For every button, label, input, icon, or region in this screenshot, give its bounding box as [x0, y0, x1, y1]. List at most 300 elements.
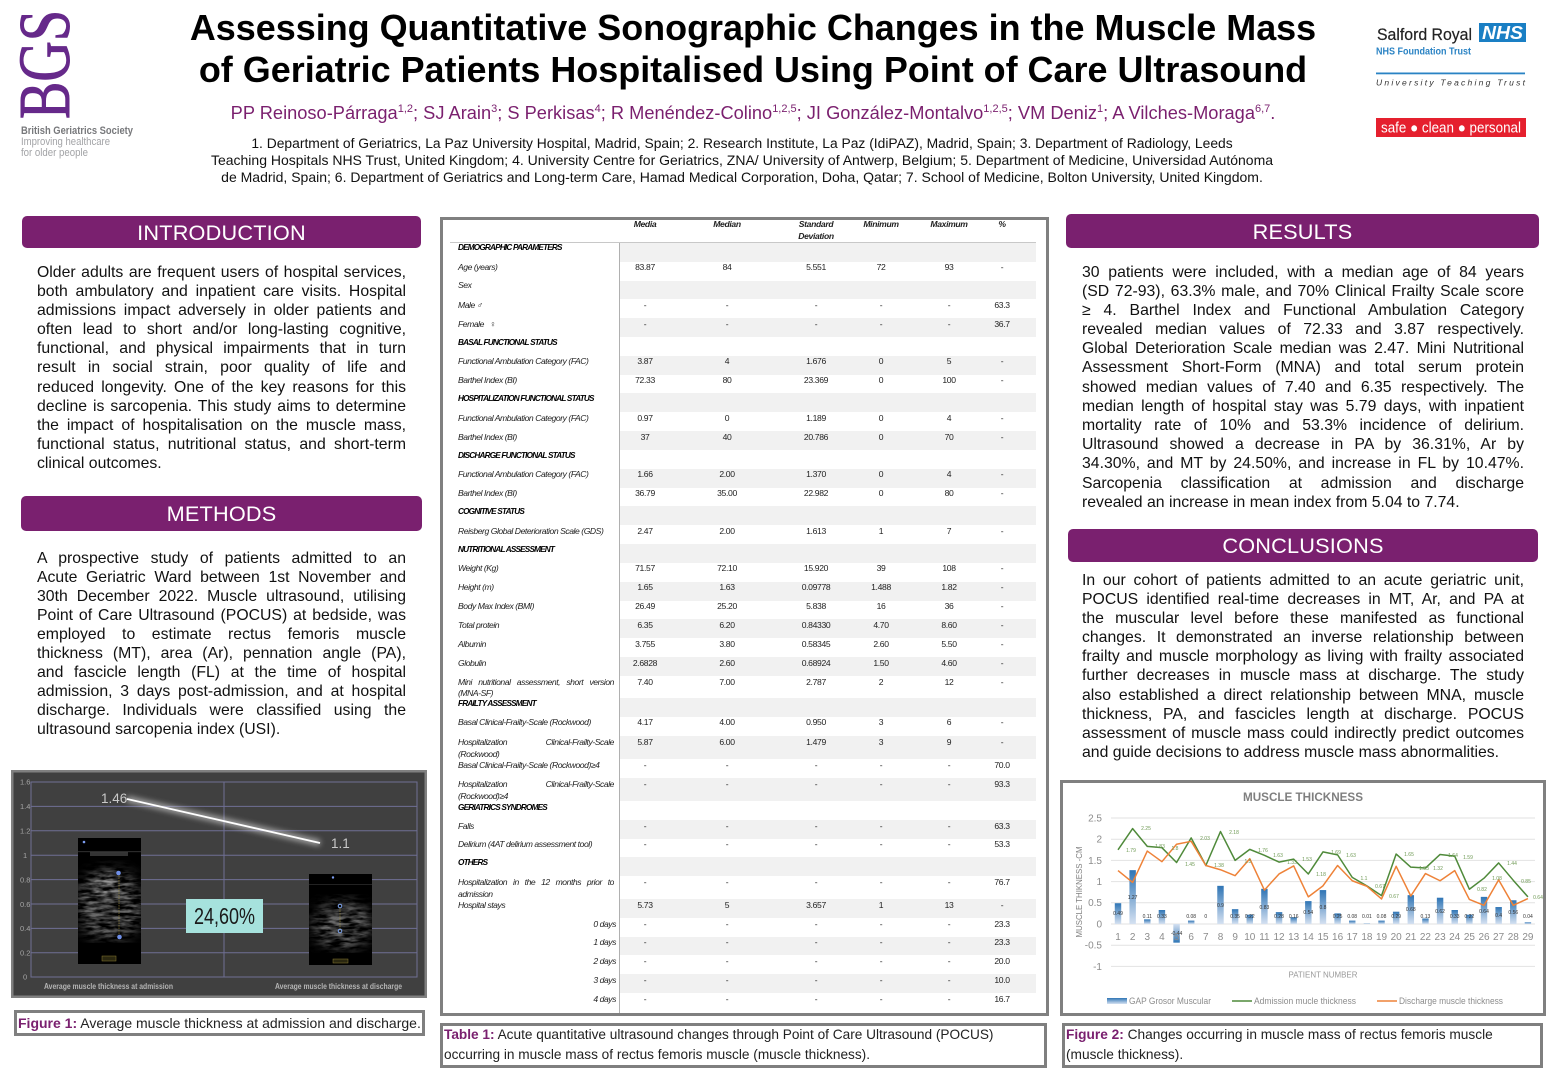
- row: hospitalization CFS: 5.87: [637, 737, 653, 747]
- figure 2: muscle thickness combo chart: 1.79: [1126, 848, 1136, 854]
- row: basal CFS: [458, 717, 1004, 727]
- text: methods: Point of Care Ultrasound (POCUS) at bedside, was: [37, 607, 406, 624]
- figure 2: muscle thickness combo chart: 6: [1188, 932, 1194, 943]
- text: introduction: Older adults are frequent users of hospital services,: [37, 264, 406, 280]
- logo: Salford Royal NHS: NHS Foundation Trust: [1376, 46, 1472, 58]
- row: basal CFS: 4.17: [637, 717, 653, 727]
- figure 2: muscle thickness combo chart: -1: [1093, 962, 1102, 973]
- row: basal BI: 80: [723, 375, 731, 385]
- table header row: Standard: [799, 219, 833, 229]
- row: GDS: 1.613: [806, 526, 826, 536]
- row: 1 days: [443, 937, 1046, 948]
- row: basal BI: 0: [879, 375, 883, 385]
- figure 2: muscle thickness combo chart: 0.08: [1377, 914, 1387, 920]
- figure 2: muscle thickness combo chart: 21: [1405, 932, 1417, 943]
- row: basal FAC: 0: [879, 356, 883, 366]
- row: MNA-SF: Mini nutritional assessment, short version: [458, 677, 614, 687]
- affiliations: Teaching Hospitals NHS Trust, United Kingdom; 4. University Centre for Geriatrics, ZNA/ University of Antwerp, Belgium; 5. Department of Medicine, Universidad Autónoma: [211, 152, 1273, 168]
- text: methods: A prospective study of patients admitted to an: [37, 550, 406, 566]
- row: total protein: -: [1001, 620, 1003, 630]
- row: hospitalization CFS: Hospitalization Clinical-Frailty-Scale: [458, 737, 614, 747]
- text: methods: Acute Geriatric Ward between 1st November and: [37, 569, 406, 586]
- text: results: [1082, 262, 1524, 512]
- text: conclusions: and guide decisions to address muscle mass abnormalities.: [1082, 744, 1499, 761]
- row: female: -: [815, 319, 817, 329]
- row: weight: 72.10: [717, 563, 737, 573]
- figure 2: muscle thickness combo chart: 0.13: [1421, 914, 1430, 920]
- row: weight: 71.57: [635, 563, 655, 573]
- row: hospitalization BI: -: [1001, 432, 1003, 442]
- figure 2: muscle thickness combo chart: 0: [1096, 920, 1102, 930]
- figure 2: muscle thickness combo chart: 2: [1130, 932, 1136, 943]
- row: MNA-SF: 7.40: [637, 677, 653, 687]
- row: prior hospitalization: -: [815, 877, 817, 887]
- row: 2 days: -: [880, 956, 882, 966]
- row: discharge FAC: 2.00: [719, 469, 735, 479]
- row: delirium: [443, 839, 1046, 850]
- row: total protein: Total protein: [458, 620, 499, 630]
- row: basal CFS at least 4: -: [726, 760, 728, 770]
- row: basal CFS at least 4: 70.0: [994, 760, 1010, 770]
- row: basal BI: 72.33: [635, 375, 655, 385]
- row: MNA-SF: 2: [879, 677, 883, 687]
- row: hospital stays: [443, 900, 1046, 911]
- row: 3 days: 10.0: [994, 975, 1010, 985]
- row: prior hospitalization: [443, 877, 1046, 888]
- row: BMI: -: [1001, 601, 1003, 611]
- table header row: Median: [713, 219, 741, 229]
- row: female: -: [726, 319, 728, 329]
- figure 2: muscle thickness combo chart: Discharge muscle thickness: [1399, 996, 1503, 1006]
- figure 1: line chart of average muscle thickness with ultrasound images: 0.4: [20, 924, 30, 933]
- row: 2 days: -: [815, 956, 817, 966]
- row: male: Male ♂: [458, 300, 483, 310]
- row: discharge BI: 0: [879, 488, 883, 498]
- figure 2: muscle thickness combo chart: Admission mucle thickness: [1254, 996, 1356, 1006]
- figure 2: muscle thickness combo chart: 26: [1478, 932, 1490, 943]
- row: 3 days: -: [726, 975, 728, 985]
- figure 2: muscle thickness combo chart: 0.33: [1157, 914, 1167, 920]
- row: geriatrics syndromes: GERIATRICS SYNDROMES: [458, 803, 547, 812]
- figure 2: muscle thickness combo chart: 1: [1096, 877, 1102, 888]
- row: basal CFS at least 4: -: [880, 760, 882, 770]
- figure 2: muscle thickness combo chart: 1.33: [1419, 866, 1429, 872]
- figure 2: muscle thickness combo chart: 17: [1347, 932, 1358, 943]
- figure 2: muscle thickness combo chart: 11: [1259, 932, 1270, 943]
- figure 2: muscle thickness combo chart: 0.67: [1375, 884, 1385, 890]
- text: introduction: [37, 264, 406, 472]
- row: weight: 39: [877, 563, 885, 573]
- caption: figure 2: [1062, 1023, 1543, 1068]
- figure 2: muscle thickness combo chart: 24: [1449, 932, 1461, 943]
- caption: figure 1: Figure 1: Average muscle thickness at admission and discharge.: [18, 1015, 421, 1031]
- row: hospitalization CFS: 3: [879, 737, 883, 747]
- title: [190, 7, 1316, 90]
- row: albumin: -: [1001, 639, 1003, 649]
- figure 1: line chart of average muscle thickness with ultrasound images: 0: [23, 972, 27, 982]
- figure 2: muscle thickness combo chart: 10: [1244, 932, 1256, 943]
- row: albumin: 0.58345: [802, 639, 830, 649]
- row: delirium: -: [815, 839, 817, 849]
- text: methods: 30th December 2022. Muscle ultrasound, utilising: [37, 588, 406, 605]
- text: methods: admission, 3 days post-admission, and at hospital: [37, 683, 406, 700]
- text: conclusions: In our cohort of patients admitted to an acute geriatric unit,: [1082, 572, 1524, 588]
- row: age: [458, 262, 1004, 272]
- row: total protein: 8.60: [941, 620, 957, 630]
- figure 2: muscle thickness combo chart: 0: [1204, 914, 1207, 920]
- figure 2: muscle thickness combo chart: -0.5: [1085, 940, 1102, 952]
- row: discharge FAC: 1.66: [637, 469, 653, 479]
- figure 2: muscle thickness combo chart: 0.62: [1435, 909, 1445, 915]
- row: falls: -: [880, 821, 882, 831]
- row: hospitalization BI: 70: [945, 432, 953, 442]
- row: 0 days: 0 days: [593, 919, 616, 929]
- table header second line: Deviation: [798, 231, 834, 241]
- figure 2: muscle thickness combo chart: [1060, 780, 1546, 1016]
- row: 3 days: 3 days: [593, 975, 616, 985]
- logo: Salford Royal NHS: University Teaching Trust: [1376, 78, 1526, 88]
- row: discharge BI: [458, 488, 1004, 498]
- figure 2: muscle thickness combo chart: 16: [1332, 932, 1344, 943]
- text: conclusions: changes. It demonstrated an inverse relationship between: [1082, 629, 1524, 646]
- figure 2: muscle thickness combo chart: 15: [1317, 932, 1329, 943]
- row: 0 days: [443, 919, 1046, 930]
- row: discharge FAC: -: [1001, 469, 1003, 479]
- figure 2: muscle thickness combo chart: 28: [1508, 932, 1519, 943]
- figure 2: muscle thickness combo chart: 1.32: [1433, 866, 1443, 872]
- figure 1: line chart of average muscle thickness with ultrasound images: 1.1: [331, 836, 350, 851]
- row: 2 days: -: [726, 956, 728, 966]
- row: globulin: 4.60: [941, 658, 957, 668]
- row: discharge BI: 35.00: [717, 488, 737, 498]
- text: results: 30 patients were included, with a median age of 84 years: [1082, 264, 1524, 280]
- row: hospitalization FAC: -: [1001, 413, 1003, 423]
- row: hospitalization FAC: 4: [947, 413, 951, 423]
- row: frailty assessment: FRAILTY ASSESSMENT: [458, 699, 536, 708]
- text: results: 34.30%, and MT by 24.50%, and increase in FL by 10.47%.: [1082, 455, 1524, 472]
- figure 2: muscle thickness combo chart: 1.53: [1302, 857, 1312, 863]
- figure 2: muscle thickness combo chart: 1.5: [1088, 856, 1102, 867]
- table row shading: [450, 242, 1036, 1013]
- row: hospital stays: 1: [879, 900, 883, 910]
- row: delirium: -: [644, 839, 646, 849]
- row: prior hospitalization: 76.7: [994, 877, 1010, 887]
- row: female: Female ♀: [458, 319, 496, 329]
- figure 2: muscle thickness combo chart: 1.18: [1316, 872, 1326, 878]
- figure 2: muscle thickness combo chart: 1.5: [1245, 859, 1252, 865]
- affiliations: 1. Department of Geriatrics, La Paz University Hospital, Madrid, Spain; 2. Research Institute, La Paz (IdiPAZ), Madrid, Spain; 3. Department of Radiology, Leeds: [251, 135, 1233, 151]
- figure 2: muscle thickness combo chart: 0.64: [1533, 895, 1543, 901]
- row: hospital stays: 5.73: [637, 900, 653, 910]
- figure 2: muscle thickness combo chart: 0.33: [1450, 914, 1460, 920]
- row: 2 days: -: [644, 956, 646, 966]
- row: male: -: [726, 300, 728, 310]
- row: falls: 63.3: [994, 821, 1010, 831]
- row: male: 63.3: [994, 300, 1010, 310]
- row: 1 days: 23.3: [994, 937, 1010, 947]
- row: basal CFS: 3: [879, 717, 883, 727]
- text: introduction: decline is sarcopenia. This study aims to determine: [37, 398, 406, 415]
- row: basal functional status: BASAL FUNCTIONAL STATUS: [458, 338, 557, 347]
- row: height: 1.82: [941, 582, 957, 592]
- figure 2: muscle thickness combo chart: 7: [1203, 932, 1209, 943]
- row: 0 days: -: [726, 919, 728, 929]
- text: results: Global Deterioration Scale median was 2.47. Mini Nutritional: [1082, 340, 1524, 357]
- figure 2: muscle thickness combo chart: 0.9: [1217, 903, 1224, 909]
- figure 2: muscle thickness combo chart: 0.11: [1143, 914, 1152, 920]
- row: 3 days: -: [948, 975, 950, 985]
- figure 2: muscle thickness combo chart: 0.01: [1362, 914, 1372, 920]
- text: conclusions: also established a direct relationship between MNA, muscle: [1082, 687, 1524, 704]
- row: basal BI: Barthel Index (BI): [458, 375, 517, 385]
- row: male: -: [644, 300, 646, 310]
- row: total protein: 6.35: [637, 620, 653, 630]
- row: hospitalization BI: 37: [641, 432, 649, 442]
- figure 2: muscle thickness combo chart: 1.69: [1331, 850, 1341, 856]
- figure 2: muscle thickness combo chart: 2: [1096, 834, 1102, 846]
- row: 3 days: -: [880, 975, 882, 985]
- figure 2: muscle thickness combo chart: 8: [1218, 932, 1224, 943]
- row: 4 days: 4 days: [593, 994, 616, 1004]
- row: hospitalization CFS at least 4: -: [880, 779, 882, 789]
- figure 2: muscle thickness combo chart: 0.16: [1289, 914, 1299, 920]
- row: 0 days: -: [815, 919, 817, 929]
- figure 2: muscle thickness combo chart: 0.56: [1508, 910, 1518, 916]
- row: BMI: Body Max Index (BMI): [458, 601, 534, 611]
- row: basal CFS: 0.950: [806, 717, 826, 727]
- row: 3 days: -: [644, 975, 646, 985]
- row: age: 84: [723, 262, 731, 272]
- row: prior hospitalization: -: [644, 877, 646, 887]
- row: female: -: [644, 319, 646, 329]
- figure 2: muscle thickness combo chart: 1: [1115, 932, 1121, 943]
- row: BMI: 26.49: [635, 601, 655, 611]
- heading: methods: METHODS: [167, 501, 276, 526]
- row: basal BI: -: [1001, 375, 1003, 385]
- row: height: 1.65: [637, 582, 653, 592]
- figure 2: muscle thickness combo chart: 0.54: [1303, 910, 1313, 916]
- figure 1: line chart of average muscle thickness with ultrasound images: 1.46: [101, 791, 127, 806]
- row: basal FAC: 5: [947, 356, 951, 366]
- heading: introduction: INTRODUCTION: [137, 220, 306, 245]
- row: hospitalization FAC: Functional Ambulation Category (FAC): [458, 413, 588, 423]
- row: BMI: [458, 601, 1004, 611]
- figure 2: muscle thickness combo chart: PATIENT NUMBER: [1288, 970, 1358, 980]
- row: weight: -: [1001, 563, 1003, 573]
- text: conclusions: frailty and muscle morphology as living with frailty associated: [1082, 648, 1524, 665]
- row: age: 5.551: [806, 262, 826, 272]
- row: basal FAC: 4: [725, 356, 729, 366]
- figure 2: muscle thickness combo chart: 9: [1232, 932, 1238, 943]
- row: falls: Falls: [458, 821, 474, 831]
- logo: Salford Royal NHS: Salford Royal: [1377, 26, 1472, 44]
- figure 2: muscle thickness combo chart: 0.22: [1245, 914, 1255, 920]
- text: results: median length of hospital stay was 5.79 days, with inpatient: [1082, 398, 1524, 415]
- row: basal CFS at least 4: [458, 760, 1010, 770]
- text: introduction: functional status, nutritional status, and short-term: [37, 436, 406, 453]
- row: basal BI: 23.369: [804, 375, 828, 385]
- figure 2: muscle thickness combo chart: 0.49: [1113, 911, 1123, 917]
- figure 2: muscle thickness combo chart: MUSCLE THIKNESS -CM: [1074, 846, 1084, 938]
- row: BMI: 25.20: [717, 601, 737, 611]
- heading: results: [1066, 214, 1539, 248]
- row: hospitalization CFS at least 4: [443, 779, 1046, 790]
- figure 2: muscle thickness combo chart: 23: [1435, 932, 1446, 943]
- row: MNA-SF: -: [1001, 677, 1003, 687]
- row: 1 days: -: [948, 937, 950, 947]
- figure 2: muscle thickness combo chart: 0.04: [1523, 914, 1533, 920]
- row: albumin: [458, 639, 1004, 649]
- figure 1: line chart of average muscle thickness with ultrasound images: 1.4: [20, 802, 30, 811]
- row: albumin: 3.755: [635, 639, 655, 649]
- row: basal FAC: 1.676: [806, 356, 826, 366]
- figure 2: muscle thickness combo chart: 2.18: [1229, 830, 1239, 836]
- text: results: Assessment Short-Form (MNA) and total serum protein: [1082, 359, 1524, 376]
- row: hospitalization BI: 0: [879, 432, 883, 442]
- row: MNA-SF: 7.00: [719, 677, 735, 687]
- figure 2: muscle thickness combo chart: 1.8: [1172, 846, 1179, 852]
- row: prior hospitalization: -: [948, 877, 950, 887]
- row: 4 days: -: [880, 994, 882, 1004]
- figure 2: muscle thickness combo chart: 1.64: [1448, 853, 1458, 859]
- figure 1: line chart of average muscle thickness with ultrasound images: 1.6: [20, 778, 30, 786]
- figure 2: muscle thickness combo chart: 14: [1303, 932, 1314, 943]
- logo: British Geriatrics Society: [18, 10, 133, 159]
- row: 2 days: 20.0: [994, 956, 1010, 966]
- row: hospital stays: 13: [945, 900, 953, 910]
- caption: figure 2: (muscle thickness).: [1066, 1047, 1183, 1062]
- row: MNA-SF: 12: [945, 677, 953, 687]
- text: methods: ultrasound sarcopenia index (USI).: [37, 721, 280, 738]
- row: BMI: 16: [877, 601, 885, 611]
- row: hospitalization CFS at least 4: -: [726, 779, 728, 789]
- text: introduction: reduced longevity. One of the key reasons for this: [37, 379, 406, 396]
- row: falls: -: [815, 821, 817, 831]
- row: globulin: 2.6828: [633, 658, 657, 668]
- row: female: -: [880, 319, 882, 329]
- row: prior hospitalization: Hospitalization in the 12 months prior to: [458, 877, 614, 887]
- row: total protein: [458, 620, 1004, 630]
- row: hospitalization FAC: 1.189: [806, 413, 826, 423]
- row: sex: Sex: [458, 280, 471, 290]
- row: discharge FAC: 0: [879, 469, 883, 479]
- row: GDS: [458, 526, 1004, 536]
- figure 2: muscle thickness combo chart: 1.33: [1287, 860, 1297, 866]
- row: albumin: 2.60: [873, 639, 889, 649]
- row: 2 days: 2 days: [593, 956, 616, 966]
- row: GDS: 2.00: [719, 526, 735, 536]
- text: methods: and fascicle length (FL) at the time of hospital: [37, 664, 406, 681]
- row: hospitalization BI: Barthel Index (BI): [458, 432, 517, 442]
- figure 2: muscle thickness combo chart: 1.1: [1361, 876, 1368, 882]
- figure 1: line chart of average muscle thickness with ultrasound images: 24,60%: [194, 903, 255, 929]
- row: basal CFS: -: [1001, 717, 1003, 727]
- figure 2: muscle thickness combo chart: 27: [1493, 932, 1505, 943]
- row: hospital stays: 5: [725, 900, 729, 910]
- row: prior hospitalization second line: admission: [458, 889, 493, 899]
- figure 1: line chart of average muscle thickness with ultrasound images: [11, 770, 427, 998]
- text: introduction: the impact of hospitalisation on the muscle mass,: [37, 417, 406, 434]
- row: globulin: 2.60: [719, 658, 735, 668]
- text: introduction: admissions impact adversely in older patients and: [37, 302, 406, 319]
- row: hospitalization BI: [458, 432, 1004, 442]
- table header row: [634, 219, 1006, 229]
- row: GDS: -: [1001, 526, 1003, 536]
- row: height: [458, 582, 1004, 592]
- caption: table 1: occurring in muscle mass of rectus femoris muscle (muscle thickness).: [444, 1047, 870, 1062]
- heading: introduction: [22, 216, 421, 248]
- row: falls: -: [644, 821, 646, 831]
- row: hospitalization FAC: 0.97: [637, 413, 653, 423]
- figure 2: muscle thickness combo chart: 0.4: [1495, 913, 1502, 919]
- caption: table 1: Table 1: Acute quantitative ultrasound changes through Point of Care Ultrasound (POCUS): [444, 1027, 993, 1042]
- row: BMI: 36: [945, 601, 953, 611]
- text: results: mortality rate of 10% and 53.3% incidence of delirium.: [1082, 417, 1524, 434]
- row: hospitalization CFS: 1.479: [806, 737, 826, 747]
- row: delirium: Delirium (4AT delirium assessment tool): [458, 839, 592, 849]
- row: male: -: [948, 300, 950, 310]
- row: discharge BI: -: [1001, 488, 1003, 498]
- row: basal CFS at least 4: -: [948, 760, 950, 770]
- title: Assessing Quantitative Sonographic Changes in the Muscle Mass: [190, 7, 1316, 48]
- figure 2: muscle thickness combo chart: 0.5: [1088, 898, 1102, 909]
- row: weight: [458, 563, 1004, 573]
- row: discharge FAC: 4: [947, 469, 951, 479]
- row: male: -: [880, 300, 882, 310]
- row: 0 days: -: [880, 919, 882, 929]
- row: female: -: [948, 319, 950, 329]
- heading: methods: [21, 496, 422, 531]
- text: introduction: both ambulatory and inpatient care visits. Hospital: [37, 283, 406, 300]
- figure 2: muscle thickness combo chart: 1.76: [1258, 848, 1268, 854]
- row: hospitalization CFS at least 4: -: [815, 779, 817, 789]
- figure 2: muscle thickness combo chart: 0.64: [1479, 909, 1489, 915]
- text: conclusions: further decreases in muscle mass at discharge. The study: [1082, 667, 1524, 684]
- figure 2: muscle thickness combo chart: 0.8: [1320, 905, 1327, 911]
- row: total protein: 0.84330: [802, 620, 830, 630]
- figure 2: muscle thickness combo chart: 5: [1174, 932, 1180, 943]
- figure 2: muscle thickness combo chart: 1.63: [1273, 853, 1283, 859]
- row: hospital stays: Hospital stays: [458, 900, 505, 910]
- row: hospitalization BI: 20.786: [804, 432, 828, 442]
- panel: table of patient characteristics: [440, 217, 1049, 1016]
- figure 1: line chart of average muscle thickness with ultrasound images: 1.2: [20, 826, 30, 836]
- figure 2: muscle thickness combo chart: 19: [1376, 932, 1387, 943]
- row: hospitalization CFS: 6.00: [719, 737, 735, 747]
- row: 0 days: -: [644, 919, 646, 929]
- figure 2: muscle thickness combo chart: 1.08: [1492, 876, 1502, 882]
- affiliations: [211, 135, 1274, 185]
- row: discharge BI: 80: [945, 488, 953, 498]
- row: male: -: [815, 300, 817, 310]
- figure 2: muscle thickness combo chart: 1.65: [1404, 852, 1414, 858]
- heading: results: RESULTS: [1253, 219, 1352, 244]
- text: methods: thickness (MT), area (Ar), pennation angle (PA),: [37, 645, 406, 662]
- row: 0 days: -: [948, 919, 950, 929]
- affiliations: de Madrid, Spain; 6. Department of Geriatrics and Long-term Care, Hamad Medical Corporation, Doha, Qatar; 7. School of Medicine, Bolton University, United Kingdom.: [221, 169, 1263, 185]
- figure 2: muscle thickness combo chart: 1.59: [1463, 855, 1473, 861]
- row: globulin: Globulin: [458, 658, 486, 668]
- row: male: [458, 300, 1010, 310]
- row: weight: 15.920: [804, 563, 828, 573]
- text: results: showed median values of 7.40 and 6.35 respectively. The: [1082, 379, 1524, 396]
- row: globulin: [458, 658, 1004, 668]
- figure 2: muscle thickness combo chart: 0.29: [1391, 914, 1401, 920]
- row: 2 days: [443, 956, 1046, 967]
- figure 2: muscle thickness combo chart: 25: [1464, 932, 1475, 943]
- row: hospitalization CFS at least 4: Hospitalization Clinical-Frailty-Scale: [458, 779, 614, 789]
- row: GDS: 2.47: [637, 526, 653, 536]
